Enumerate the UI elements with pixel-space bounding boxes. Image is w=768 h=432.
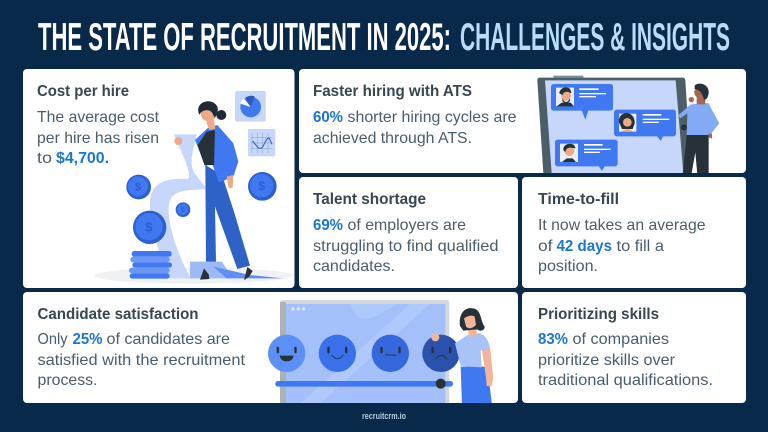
illustration: satisfaction screen with emoji faces and woman (268, 300, 493, 407)
text: faster hiring body: achieved through ATS. (313, 130, 472, 147)
chat bubble 2 (614, 110, 676, 141)
slider (275, 379, 453, 389)
icon: coin stack (129, 251, 172, 279)
text: candidate satisfaction body: Only (38, 331, 68, 348)
heading: faster hiring: Faster hiring with ATS (313, 83, 472, 100)
text: time-to-fill body: 42 days (556, 238, 612, 255)
tablet (537, 76, 691, 173)
text: candidate satisfaction body: of candidates are (106, 331, 230, 348)
text: cost per hire body (37, 109, 160, 167)
icon: neutral face (372, 335, 409, 372)
man figure (679, 84, 719, 175)
icon: line chart tile (248, 129, 275, 156)
text: cost per hire body: to (37, 150, 52, 167)
icon: sad face (422, 335, 460, 372)
icon: coins: $ (145, 219, 153, 234)
text: cost per hire body: $4,700. (56, 150, 109, 167)
text: cost per hire body: The average cost (37, 109, 160, 126)
text: prioritizing skills body (538, 331, 713, 389)
heading: time-to-fill: Time-to-fill (538, 191, 619, 208)
icon: pie chart tile (235, 91, 266, 122)
panel: faster hiring with ATS (299, 69, 746, 175)
heading: talent shortage: Talent shortage (313, 191, 426, 208)
text: prioritizing skills body: 83% (538, 331, 568, 348)
chat bubble 3 (555, 140, 618, 171)
text: talent shortage body (313, 217, 498, 275)
illustration: tablet with chat bubbles and man (537, 76, 719, 175)
panel: time-to-fill (522, 177, 746, 288)
text: time-to-fill body: It now takes an average (538, 217, 706, 234)
icon: coins: $ (181, 207, 185, 214)
text: cost per hire body: per hire has risen (37, 130, 159, 147)
text: faster hiring body: 60% (313, 109, 343, 126)
text: prioritizing skills body: of companies (572, 331, 669, 348)
panel: prioritizing skills (522, 292, 746, 403)
title: THE STATE OF RECRUITMENT IN 2025: (38, 16, 451, 59)
panel: talent shortage (299, 177, 518, 288)
icon: coins (126, 172, 277, 244)
text: talent shortage body: candidates. (313, 258, 395, 275)
text: talent shortage body: of employers are (348, 217, 466, 234)
text: prioritizing skills body: prioritize skills over (538, 352, 676, 369)
icon: coins: $ (135, 181, 141, 193)
text: time-to-fill body: of (538, 238, 553, 255)
text: candidate satisfaction body: 25% (72, 331, 102, 348)
icon: very happy face (268, 335, 305, 372)
text: time-to-fill body (538, 217, 706, 275)
illustration: woman with long receipt and coins (94, 91, 293, 284)
text: time-to-fill body: to fill a (616, 238, 664, 255)
chat bubble 1 (551, 84, 613, 120)
text: talent shortage body: 69% (313, 217, 343, 234)
text: candidate satisfaction body: satisfied with the recruitment (38, 352, 246, 369)
woman figure (431, 308, 493, 405)
heading: prioritizing skills: Prioritizing skills (538, 306, 659, 323)
text: talent shortage body: struggling to find qualified (313, 238, 498, 255)
text: time-to-fill body: position. (538, 258, 598, 275)
panel: cost per hire (23, 69, 294, 288)
footer: source: recruitcrm.io (362, 411, 406, 421)
text: faster hiring body (313, 109, 517, 147)
text: candidate satisfaction body (38, 331, 246, 389)
text: prioritizing skills body: traditional qualifications. (538, 372, 713, 389)
icon: happy face (319, 335, 356, 372)
icon: coins: $ (258, 179, 265, 193)
receipt paper (150, 134, 207, 278)
heading: candidate satisfaction: Candidate satisfaction (38, 306, 198, 323)
woman figure (174, 101, 253, 280)
screen (280, 300, 449, 407)
text: candidate satisfaction body: process. (38, 372, 98, 389)
heading: cost per hire: Cost per hire (37, 83, 129, 100)
panel: candidate satisfaction (23, 292, 518, 407)
text: faster hiring body: shorter hiring cycles are (348, 109, 517, 126)
